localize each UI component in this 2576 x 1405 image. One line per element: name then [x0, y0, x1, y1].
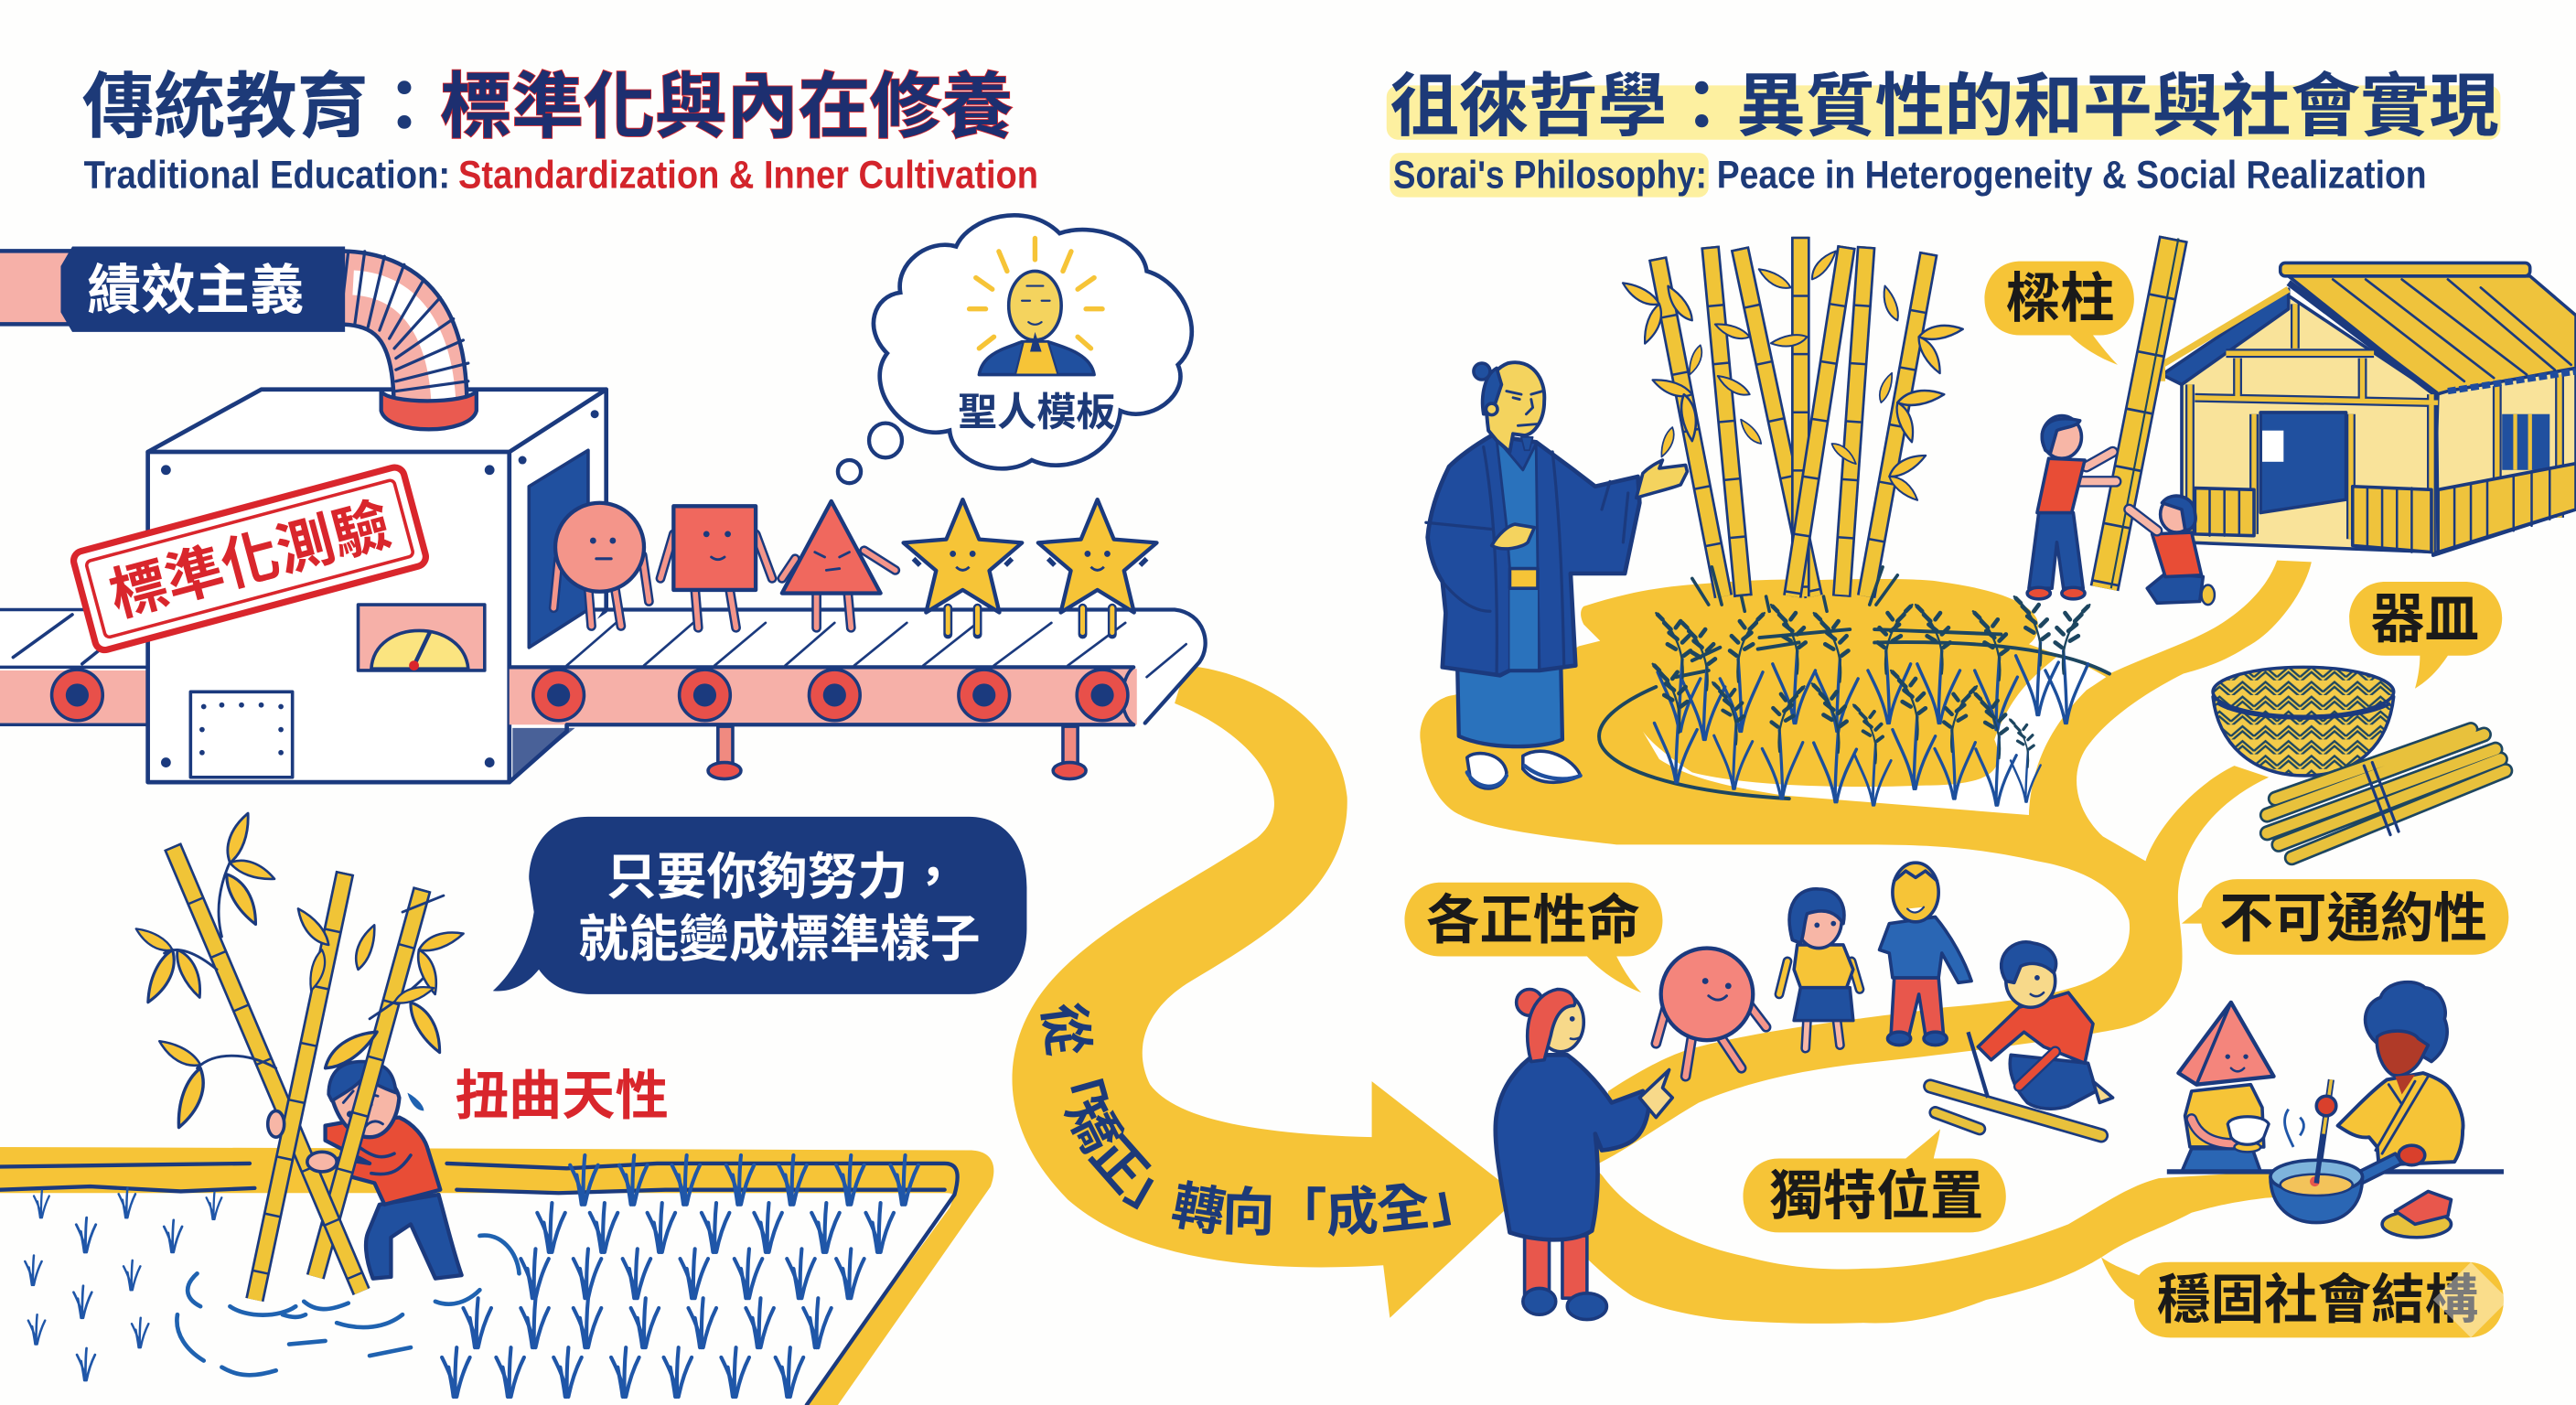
robe — [1428, 435, 1639, 675]
person struggling — [326, 1062, 462, 1279]
steam — [2285, 1110, 2303, 1147]
girl — [1779, 889, 1860, 1048]
cloud outline — [874, 215, 1192, 468]
right wall — [2433, 365, 2576, 555]
icon: bamboo bundle — [2267, 730, 2506, 858]
counter line — [2167, 1170, 2504, 1173]
fist — [1492, 524, 1534, 549]
left subtitle part two: Standardization & Inner Cultivation — [458, 154, 1038, 197]
kneeling boy with bamboo — [1930, 942, 2113, 1135]
teacher coat — [1496, 1055, 1649, 1239]
machine opening — [529, 450, 588, 648]
character: circle — [553, 503, 649, 626]
arrow text: 從「矯正」轉向「成全」 — [1040, 1003, 1451, 1237]
machine front — [148, 452, 510, 782]
house — [2162, 263, 2576, 555]
label: each fulfils nature: 各正性命 — [1426, 876, 1640, 954]
teacher legs — [1523, 1236, 1606, 1320]
head — [1474, 362, 1544, 452]
pipe collar — [381, 391, 477, 429]
bamboo pillar — [2105, 238, 2178, 588]
character: star two — [1038, 499, 1157, 634]
slatted lower walls — [2195, 464, 2576, 552]
label: vessels: 器皿 — [2371, 575, 2479, 654]
label: each fulfils nature — [1405, 876, 1662, 992]
right subtitle part two: Peace in Heterogeneity & Social Realization — [1717, 154, 2427, 197]
bent bamboo — [133, 810, 466, 1300]
ridge — [2281, 263, 2530, 276]
label: beams and pillars — [1984, 255, 2134, 365]
rollers — [533, 670, 1128, 721]
character: triangle — [782, 501, 896, 627]
bamboo on ground — [1930, 1032, 2101, 1135]
cooking pot — [2270, 1134, 2425, 1223]
eave tiles — [2448, 371, 2576, 391]
label: unique position: 獨特位置 — [1769, 1153, 1983, 1230]
character: square — [660, 506, 772, 627]
right subtitle highlight — [1390, 153, 1709, 198]
head — [2002, 942, 2056, 1007]
field outline — [1599, 629, 2109, 799]
shirt — [1978, 992, 2093, 1063]
front wall — [2182, 295, 2438, 552]
house beams — [2190, 304, 2560, 552]
label: incommensurability: 不可通約性 — [2219, 874, 2487, 952]
speech bubble: effort: 只要你夠努力， — [606, 835, 958, 908]
yellow lower path — [1569, 1151, 2292, 1324]
figure: teacher — [1496, 989, 1672, 1320]
speech bubble: effort — [493, 817, 1026, 994]
foot — [2093, 1081, 2113, 1102]
panel: rice field and bamboo grove — [1599, 237, 2109, 815]
machine rivets — [161, 410, 599, 767]
thought cloud: sage template — [838, 215, 1192, 483]
food plate — [2382, 1191, 2452, 1238]
rice paddy white patches — [1643, 652, 2106, 815]
triangle body — [2185, 1085, 2264, 1147]
door — [2260, 413, 2346, 513]
robe inner — [1497, 439, 1538, 569]
yellow branching path network — [1420, 561, 2312, 1165]
lower kimono — [1457, 658, 1562, 746]
hands — [2019, 1052, 2055, 1086]
cook collar — [2376, 1077, 2428, 1153]
cook — [2316, 982, 2463, 1183]
arm skin — [2192, 1119, 2234, 1143]
figure: Sorai scholar — [1426, 362, 1687, 788]
icon: woven basket — [2213, 667, 2394, 776]
label: performance: 績效主義 — [87, 247, 304, 326]
heading: sorai philosophy — [1387, 49, 2500, 198]
gauge — [359, 605, 485, 670]
side window — [2502, 414, 2549, 470]
right title highlight — [1387, 85, 2500, 140]
right conveyor belt — [510, 609, 1206, 724]
sparkle overlay — [2433, 1262, 2508, 1337]
triangle head — [2178, 1003, 2274, 1085]
dense rice sprouts — [442, 1155, 918, 1397]
triangle person with rice bowl — [2178, 1003, 2274, 1172]
label: vessels — [2349, 575, 2502, 689]
gable beams — [2162, 289, 2289, 384]
left subtitle part one: Traditional Education: — [84, 154, 450, 197]
right title: 徂徠哲學：異質性的和平與社會實現 — [1390, 49, 2499, 150]
teacher hand — [1639, 1070, 1672, 1118]
right subtitle part one: Sorai's Philosophy: — [1393, 154, 1707, 197]
stamp: standardized test — [71, 466, 428, 652]
afro hair — [2366, 982, 2447, 1062]
machine side — [510, 390, 606, 782]
hands gripping bamboo — [268, 1110, 337, 1172]
input pipe — [0, 252, 468, 408]
scene: building with bamboo pillar — [1984, 238, 2576, 605]
legs — [2010, 1055, 2097, 1109]
rice bowl — [2227, 1117, 2269, 1152]
obi sash — [1509, 569, 1538, 588]
character: star one — [904, 499, 1022, 634]
arm — [2192, 1119, 2234, 1143]
heading: traditional education — [82, 48, 1038, 197]
sparse rice sprouts — [25, 1188, 221, 1380]
rice field border — [0, 1147, 993, 1405]
sage portrait — [970, 238, 1102, 375]
label: unique position — [1743, 1129, 2006, 1232]
conveyor leg left — [708, 726, 741, 779]
neck — [2395, 1075, 2415, 1094]
conveyor leg right — [1053, 726, 1086, 779]
character: circle on path — [1656, 949, 1766, 1077]
sandals — [1467, 751, 1581, 788]
hatch under machine — [512, 728, 575, 779]
speech bubble: effort: 就能變成標準樣子 — [578, 898, 981, 971]
teacher head — [1517, 989, 1583, 1062]
boy standing — [1880, 863, 1971, 1046]
thought bubbles — [838, 424, 902, 483]
robe folds — [1426, 447, 1628, 674]
left conveyor belt — [0, 609, 156, 724]
access panel — [190, 692, 293, 778]
door window — [2262, 431, 2283, 462]
raised hand — [1637, 460, 1687, 498]
panel: standardization machine — [0, 215, 1206, 782]
man lifting — [2027, 416, 2116, 599]
skirt — [2182, 1149, 2260, 1172]
left title: 傳統教育：標準化與內在修養 — [82, 48, 1014, 153]
lower robe strip — [1509, 586, 1538, 669]
label: twisted nature: 扭曲天性 — [455, 1052, 669, 1130]
stamp: standardized test: 標準化測驗 — [100, 478, 399, 633]
water ripples — [177, 1236, 520, 1375]
machine top — [148, 390, 606, 452]
rice plants — [1653, 596, 2089, 805]
cook robe — [2338, 1073, 2463, 1165]
bamboo grove — [1619, 237, 1964, 611]
label: beams and pillars: 樑柱 — [2006, 255, 2114, 334]
roof plane — [2289, 276, 2576, 394]
label: sage template: 聖人模板 — [958, 381, 1115, 437]
panel: distorted nature — [0, 810, 1026, 1405]
cook face — [2377, 1031, 2428, 1076]
main yellow flow arrow — [1012, 666, 1519, 1318]
child lifting — [2130, 496, 2215, 605]
label: stable social structure: 穩固社會結構 — [2157, 1256, 2478, 1334]
spoon — [2316, 1079, 2336, 1183]
